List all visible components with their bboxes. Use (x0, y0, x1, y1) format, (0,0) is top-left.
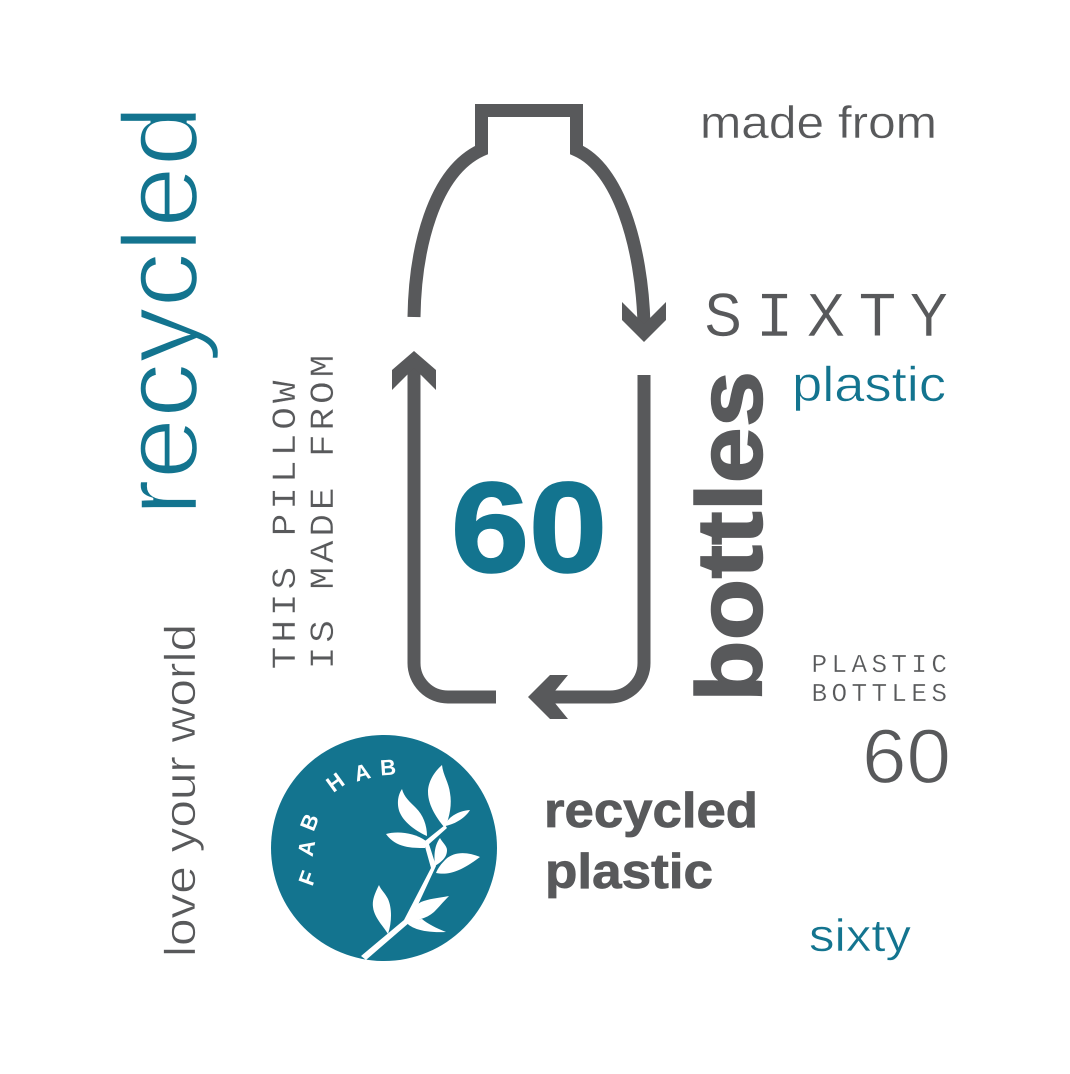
logo text: FAB HAB: B (379, 754, 397, 781)
vertical word: recycled: recycled (100, 105, 220, 516)
vertical text: this pillow is made from (267, 355, 343, 669)
logo text: FAB HAB: A (351, 758, 373, 787)
arrow: bottle top down the right side (414, 110, 666, 342)
logo text: FAB HAB: A (293, 838, 320, 858)
logo text: FAB HAB (293, 754, 397, 889)
text: recycled plastic: plastic (545, 845, 713, 899)
text: sixty: sixty (809, 910, 912, 961)
text: plastic: plastic (792, 358, 946, 412)
logo text: FAB HAB: H (322, 768, 349, 797)
vertical word: love your world: love your world (156, 624, 205, 957)
logo text: FAB HAB: B (295, 810, 324, 834)
vertical text: this pillow is made from: IS MADE FROM (305, 355, 343, 669)
vertical word: bottles: bottles (678, 371, 782, 702)
text: made from: made from (700, 97, 937, 148)
icon: leaf branch (361, 765, 480, 960)
vertical text: this pillow is made from: THIS PILLOW (267, 380, 305, 669)
logo text: FAB HAB: F (293, 868, 322, 889)
text: recycled plastic (544, 784, 758, 899)
text: plastic bottles label (812, 650, 947, 709)
text: recycled plastic: recycled (544, 784, 758, 838)
number: 60 inside bottle: 60 (451, 456, 607, 600)
arrow: bottom up the left side (392, 351, 496, 697)
text: plastic bottles label: PLASTIC (812, 650, 947, 680)
logo: Fab Hab badge (271, 735, 497, 961)
arrow: right side to bottom (528, 375, 644, 719)
number: 60 small: 60 (862, 714, 951, 800)
text: SIXTY: SIXTY (704, 284, 948, 356)
bottle outline with recycling arrows (392, 110, 666, 719)
text: plastic bottles label: BOTTLES (812, 679, 947, 709)
